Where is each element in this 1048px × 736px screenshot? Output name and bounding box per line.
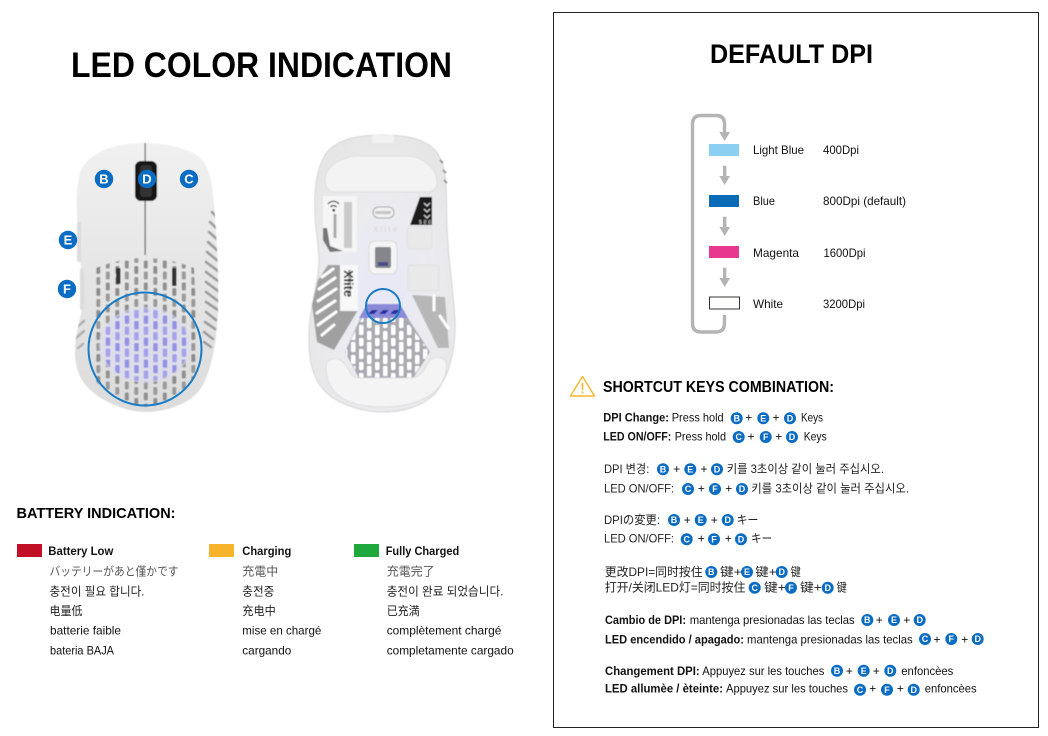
label E [59,231,77,249]
DPI cycle loop arrow [692,116,730,332]
shortcut row: English DPI change: DPI Change: [603,411,669,425]
shortcut row: Chinese LED on/off: D [824,583,831,593]
shortcut row: English DPI change: + [745,411,752,425]
shortcut row: Japanese LED on/off: LED ON/OFF: [604,532,674,546]
shortcut row: Japanese DPI change: E [698,515,704,525]
shortcut row: Korean DPI change: 키를 3초이상 같이 눌러 주십시오. [727,462,884,476]
shortcut row: Korean DPI change: B [660,464,667,474]
DPI row: light blue: Light Blue [753,143,804,157]
shortcut row: Chinese DPI change: 键+ [720,565,742,579]
shortcut row: French LED on/off: enfoncèes [925,682,977,696]
shortcut row: Chinese DPI change [605,565,801,579]
battery low translations: batterie faible [50,624,121,638]
Xlite sticker text: Xlite [341,270,356,297]
LED zone circle [88,292,202,406]
shortcut row: Spanish DPI change: D [916,615,923,625]
shortcut row: Chinese LED on/off: 键+ [800,580,822,594]
shortcut row: Chinese LED on/off: 键 [837,580,847,594]
label C [180,170,198,188]
shortcut row: French LED on/off: F [884,685,890,695]
shortcut row: Chinese DPI change: 键 [791,565,801,579]
charging translations: 充電中 [242,563,278,578]
shortcut row: Korean LED on/off: + [698,482,705,496]
battery low translations: 电量低 [50,604,82,618]
shortcut row: Spanish DPI change: B [864,615,871,625]
DPI row: magenta: Magenta [753,246,799,260]
shortcut row: Korean DPI change: D [714,464,721,474]
label F [58,280,76,298]
shortcut row: Japanese LED on/off: D [738,534,745,544]
shortcut row: French DPI change: E [861,666,867,676]
charging translations: 充电中 [242,603,276,618]
arrow: blue to magenta [719,217,730,236]
charging translations [242,563,322,658]
charging translations: 충전중 [242,584,274,598]
battery indication heading: BATTERY INDICATION: [16,505,176,522]
shortcut row: French LED on/off: C [857,685,864,695]
shortcut row: Spanish LED on/off: D [974,634,981,644]
mouse underside body: Xlite [373,225,398,234]
shortcut row: French DPI change: Appuyez sur les touches [702,664,824,678]
shortcut row: Korean DPI change: DPI 변경: [604,462,649,476]
shortcut row: Spanish LED on/off: + [933,632,941,646]
panel: default DPI and shortcuts [554,12,1038,728]
fully charged translations: completamente cargado [387,644,514,658]
shortcut row: English DPI change: B [733,414,740,424]
shortcut row: Chinese DPI change: B [708,567,715,577]
shortcut row: French LED on/off: LED allumèe / èteinte: [605,682,723,696]
battery low translations: バッテリーがあと僅かです [50,563,178,578]
shortcut row: Chinese DPI change: E [744,567,750,577]
mouse bottom view [309,135,455,412]
shortcut row: Korean LED on/off [604,482,909,496]
shortcut row: French LED on/off [605,682,977,696]
label B [95,170,113,188]
shortcut row: English LED on/off: LED ON/OFF: [603,430,671,444]
shortcut row: Spanish LED on/off: + [961,632,968,646]
shortcut row: Japanese LED on/off: + [725,532,732,546]
heading: shortcut keys: SHORTCUT KEYS COMBINATION: [603,379,834,396]
mouse top view with button labels [58,143,218,412]
shortcut row: English LED on/off: F [763,432,769,442]
shortcut row: French LED on/off: D [910,685,917,695]
shortcut row: Korean LED on/off: F [712,484,718,494]
shortcut row: English DPI change: + [772,411,780,425]
DPI row: white: White [753,297,783,311]
label E: E [64,233,73,248]
shortcut row: Chinese DPI change: 键+ [755,565,777,579]
label D: D [142,172,152,187]
shortcut row: Korean DPI change [604,462,884,476]
fully charged translations: 充電完了 [387,564,435,578]
shortcut row: English LED on/off: C [735,432,742,442]
fully charged translations: complètement chargé [387,624,502,638]
mouse underside body: WIRELESS [347,270,352,297]
shortcut row: French DPI change: B [834,666,841,676]
shortcut row: English LED on/off: Press hold [675,430,726,444]
icon: warning triangle [570,376,594,396]
battery column: low [17,544,178,658]
battery column: fully charged [354,544,514,658]
shortcut row: French LED on/off: + [897,682,904,696]
battery low translations [50,563,178,658]
shortcut row: Korean LED on/off: D [739,484,746,494]
shortcut row: Japanese LED on/off [604,532,772,546]
shortcut row: French DPI change: enfoncèes [901,664,953,678]
shortcut row: Japanese DPI change: キー [737,513,758,527]
label D [138,170,156,188]
shortcut row: English LED on/off: Keys [804,430,827,444]
battery low translations: 충전이 필요 합니다. [50,584,144,598]
shortcut row: French LED on/off: Appuyez sur les touches [726,682,848,696]
sensor LED circle [366,289,400,323]
shortcut row: English DPI change [603,411,823,425]
shortcut row: French DPI change: D [887,666,894,676]
red swatch [17,544,42,557]
shortcut row: English DPI change: Keys [801,411,823,425]
fully charged heading: Fully Charged [386,544,459,558]
shortcut row: Japanese LED on/off: C [683,534,690,544]
shortcut row: Spanish LED on/off: C [922,634,929,644]
shortcut row: Japanese LED on/off: F [711,534,717,544]
green swatch [354,544,379,557]
shortcut row: Japanese DPI change: + [711,513,718,527]
shortcut row: Japanese LED on/off: + [698,532,705,546]
shortcut row: Spanish LED on/off: LED encendido / apagado: [605,632,744,646]
shortcut row: French LED on/off: + [869,682,876,696]
shortcut row: Japanese DPI change: D [724,515,731,525]
shortcut row: Chinese DPI change: 更改DPI=同时按住 [605,565,703,579]
shortcut row: Korean DPI change: + [673,462,680,476]
charging heading: Charging [242,544,291,558]
shortcut row: French DPI change: + [873,664,880,678]
shortcut row: Chinese LED on/off: 打开/关闭LED灯=同时按住 [605,580,745,594]
shortcut row: Korean LED on/off: C [685,484,692,494]
charging translations: cargando [242,644,292,658]
DPI row: blue: Blue [753,194,775,208]
battery low heading: Battery Low [48,544,114,558]
battery column: charging [209,544,322,658]
arrow: magenta to white [719,268,730,287]
shortcut row: Korean DPI change: E [687,464,693,474]
shortcut row: English LED on/off: D [789,432,796,442]
mouse underside body: 500 [419,220,431,226]
shortcut row: Japanese DPI change: DPIの変更: [604,512,660,527]
shortcut row: Spanish LED on/off: mantenga presionadas las teclas [747,632,913,646]
shortcut row: Spanish DPI change [605,613,926,627]
shortcut row: Japanese DPI change: B [671,515,678,525]
title: LED color indication: LED COLOR INDICATION [71,46,452,85]
battery low translations: bateria BAJA [50,644,114,658]
shortcut row: Chinese LED on/off: C [751,583,758,593]
DPI row: blue [709,194,906,208]
mouse top body [75,143,218,412]
shortcut row: Spanish DPI change: mantenga presionadas las teclas [690,613,855,627]
charging translations: mise en chargé [242,624,322,638]
DPI row: blue: 800Dpi (default) [823,194,906,208]
shortcut row: Chinese LED on/off: 键+ [764,580,786,594]
DPI row: magenta [709,246,866,260]
shortcut row: Spanish DPI change: + [903,613,910,627]
shortcut row: French DPI change [605,664,953,678]
shortcut row: Korean LED on/off: 키를 3초이상 같이 눌러 주십시오. [751,482,909,496]
shortcut row: Spanish LED on/off: F [949,634,955,644]
shortcut row: Korean LED on/off: LED ON/OFF: [604,482,674,496]
fully charged translations: 충전이 완료 되었습니다. [387,584,503,598]
shortcut row: English LED on/off [603,430,827,444]
shortcut row: Chinese LED on/off [605,580,847,594]
shortcut row: Korean LED on/off: + [725,482,732,496]
shortcut row: Korean DPI change: + [700,462,708,476]
shortcut row: French DPI change: Changement DPI: [605,664,700,678]
label B: B [99,172,109,187]
DPI row: white: 3200Dpi [823,297,865,311]
shortcut row: English LED on/off: + [775,430,782,444]
shortcut row: English LED on/off: + [747,430,755,444]
DPI row: magenta: 1600Dpi [824,246,866,260]
panel border [554,12,1038,728]
label F: F [63,282,71,297]
arrow: light blue to blue [719,166,730,185]
shortcut row: Japanese DPI change [604,512,758,527]
shortcut row: Spanish LED on/off [605,632,984,646]
mouse underside body [309,135,455,412]
shortcut row: Chinese LED on/off: F [788,583,794,593]
orange swatch [209,544,234,557]
shortcut row: French DPI change: + [846,664,853,678]
shortcut row: Spanish DPI change: E [891,615,897,625]
DPI row: light blue: 400Dpi [823,143,859,157]
shortcut row: English DPI change: Press hold [672,411,724,425]
heading: default DPI: DEFAULT DPI [710,39,873,69]
shortcut row: Spanish DPI change: + [876,613,883,627]
label C: C [184,172,194,187]
fully charged translations [387,564,514,658]
shortcut row: English DPI change: E [760,414,766,424]
DPI row: white [710,297,865,311]
shortcut row: English DPI change: D [787,414,794,424]
shortcut row: Japanese LED on/off: キー [751,532,772,546]
fully charged translations: 已充満 [387,603,420,618]
DPI row: light blue [709,143,859,157]
sensor window and slotted grid [345,306,430,380]
shortcut row: Spanish DPI change: Cambio de DPI: [605,613,686,627]
shortcut row: Japanese DPI change: + [684,513,691,527]
shortcut row: Chinese DPI change: D [778,567,785,577]
